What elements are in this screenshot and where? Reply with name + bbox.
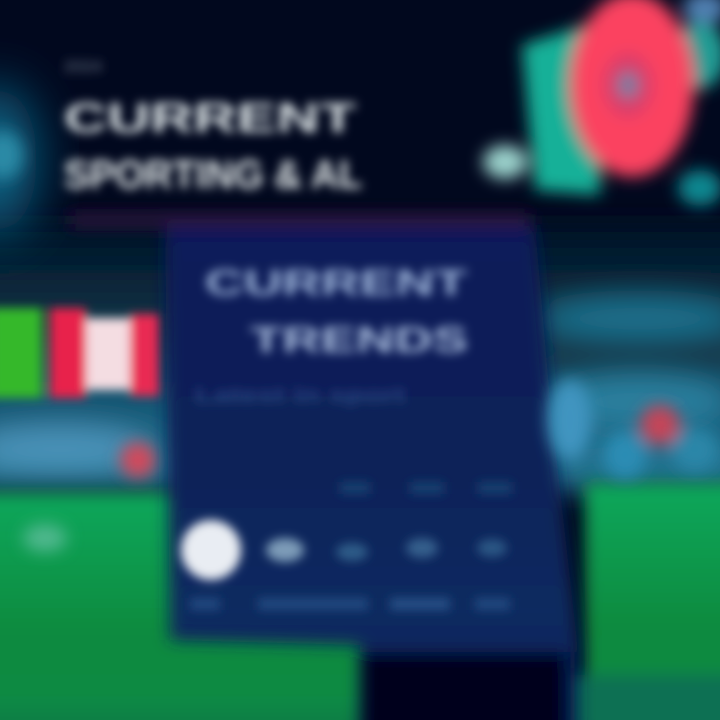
green pitch <box>0 482 720 720</box>
panel heading: CURRENT <box>205 262 467 303</box>
main title: CURRENT <box>64 94 356 141</box>
main title <box>64 57 362 197</box>
teal backing shape <box>522 20 600 195</box>
panel heading <box>205 262 468 360</box>
top right flower illustration <box>483 0 720 206</box>
main title: 2024 <box>64 57 102 76</box>
right side detail: red and blue figures <box>548 380 719 479</box>
red flower <box>570 0 694 177</box>
left glow spot <box>0 131 23 179</box>
small red marker, left <box>23 442 156 552</box>
background: stadium band <box>0 225 720 490</box>
main title: SPORTING & AL <box>64 153 362 197</box>
central panel <box>70 214 578 720</box>
stats row <box>181 482 512 610</box>
teal circle, lower right <box>678 170 720 206</box>
panel background <box>70 214 578 720</box>
left flag graphic <box>0 308 160 398</box>
left teal glow <box>0 85 37 235</box>
panel heading: TRENDS <box>250 319 468 360</box>
panel subtitle: Latest in sport <box>195 385 406 407</box>
